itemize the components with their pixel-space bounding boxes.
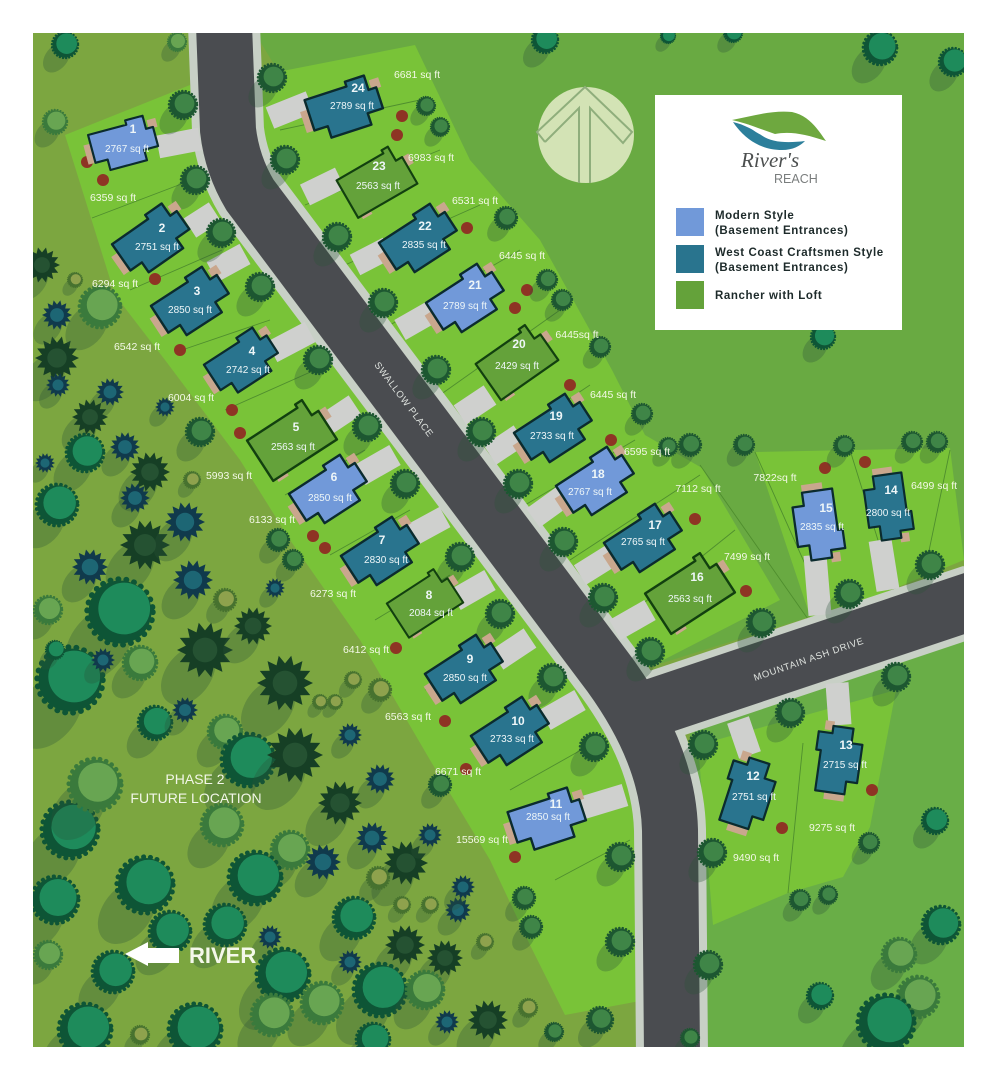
house 7: 7 xyxy=(379,533,386,547)
legend text: craftsman: (Basement Entrances) xyxy=(715,262,848,274)
house 21: 2789 sq ft xyxy=(443,301,487,312)
house 3 xyxy=(150,264,230,337)
lot area labels: 6133 sq ft xyxy=(249,514,295,526)
lot area labels: 6273 sq ft xyxy=(310,588,356,600)
house 9: 2850 sq ft xyxy=(443,673,487,684)
lot area labels: 6294 sq ft xyxy=(92,278,138,290)
house 17: 2765 sq ft xyxy=(621,537,665,548)
north compass xyxy=(537,87,634,183)
house 17: 17 xyxy=(648,518,662,532)
house 23: 23 xyxy=(372,159,386,173)
house 20: 2429 sq ft xyxy=(495,361,539,372)
phase 2 label: FUTURE LOCATION xyxy=(130,790,262,806)
lot area labels: 6445sq ft xyxy=(555,329,599,341)
house 11: 11 xyxy=(550,797,563,811)
house 2: 2751 sq ft xyxy=(135,242,179,253)
house 10: 2733 sq ft xyxy=(490,734,534,745)
house 2 xyxy=(110,201,191,275)
lot area labels: 5993 sq ft xyxy=(206,470,252,482)
lot area labels xyxy=(90,69,957,864)
west lots xyxy=(65,85,645,1015)
lot area labels: 6681 sq ft xyxy=(394,69,440,81)
lot area labels: 6499 sq ft xyxy=(911,480,957,492)
house 8: 8 xyxy=(426,588,433,602)
house 9: 9 xyxy=(467,652,474,666)
house 17 xyxy=(602,502,683,574)
legend text: modern: (Basement Entrances) xyxy=(715,225,848,237)
house 24: 2789 sq ft xyxy=(330,101,374,112)
phase 2 label xyxy=(130,771,262,806)
house 10: 10 xyxy=(511,714,525,728)
house 12 xyxy=(718,750,777,836)
legend swatch: craftsman xyxy=(676,245,704,273)
lot lines xyxy=(92,100,950,893)
house 8 xyxy=(386,568,464,639)
river arrow and label: RIVER xyxy=(189,943,256,968)
house 10 xyxy=(470,694,550,767)
house 18: 2767 sq ft xyxy=(568,487,612,498)
legend text: rancher: Rancher with Loft xyxy=(715,290,822,302)
legend swatch: rancher xyxy=(676,281,704,309)
legend panel xyxy=(655,95,902,330)
house 4 xyxy=(202,326,280,394)
logo: River's Reach: REACH xyxy=(774,172,818,186)
street name: Swallow Place: SWALLOW PLACE xyxy=(372,360,435,440)
lot area labels: 6595 sq ft xyxy=(624,446,670,458)
house 15: 15 xyxy=(819,501,833,515)
house 1: 2767 sq ft xyxy=(105,144,149,155)
lot area labels: 6004 sq ft xyxy=(168,392,214,404)
house 14 xyxy=(862,466,915,542)
lot area labels: 6983 sq ft xyxy=(408,152,454,164)
house 16: 16 xyxy=(690,570,704,584)
house 11 xyxy=(503,786,588,851)
legend text: modern: Modern Style xyxy=(715,210,794,222)
house 22: 2835 sq ft xyxy=(402,240,446,251)
lot area labels: 15569 sq ft xyxy=(456,834,508,846)
house 13: 2715 sq ft xyxy=(823,760,867,771)
house 16 xyxy=(644,552,736,636)
logo: River's Reach: River's xyxy=(740,148,799,172)
east lots xyxy=(250,45,780,672)
house 21 xyxy=(424,262,505,334)
house 6 xyxy=(288,452,368,525)
lot area labels: 6531 sq ft xyxy=(452,195,498,207)
lot area labels: 6445 sq ft xyxy=(590,389,636,401)
phase 2 label: PHASE 2 xyxy=(165,771,225,787)
house 22 xyxy=(378,202,458,274)
house 7: 2830 sq ft xyxy=(364,555,408,566)
house 14: 14 xyxy=(884,483,898,497)
house 16: 2563 sq ft xyxy=(668,594,712,605)
driveways xyxy=(158,102,888,808)
lot area labels: 9275 sq ft xyxy=(809,822,855,834)
logo: River's Reach xyxy=(732,112,826,186)
house 4: 2742 sq ft xyxy=(226,365,270,376)
legend text: craftsman: West Coast Craftsmen Style xyxy=(715,247,884,259)
house 24: 24 xyxy=(351,81,365,95)
house 5 xyxy=(246,398,338,482)
lot area labels: 7499 sq ft xyxy=(724,551,770,563)
house 15: 2835 sq ft xyxy=(800,522,844,533)
house 14: 2800 sq ft xyxy=(866,508,910,519)
house 20: 20 xyxy=(512,337,526,351)
house 1 xyxy=(84,114,160,172)
legend swatch: modern xyxy=(676,208,704,236)
house 5: 5 xyxy=(293,420,300,434)
river arrow and label xyxy=(125,942,256,968)
house 20 xyxy=(474,324,560,402)
lot area labels: 6671 sq ft xyxy=(435,766,481,778)
house 19: 2733 sq ft xyxy=(530,431,574,442)
house 18: 18 xyxy=(591,467,605,481)
house 23 xyxy=(336,146,418,219)
house 2: 2 xyxy=(159,221,166,235)
house 4: 4 xyxy=(249,344,256,358)
house 11: 2850 sq ft xyxy=(526,812,570,823)
house 8: 2084 sq ft xyxy=(409,608,453,619)
houses xyxy=(80,72,915,856)
lot area labels: 7822sq ft xyxy=(753,472,797,484)
lot area labels: 6412 sq ft xyxy=(343,644,389,656)
house 13: 13 xyxy=(839,738,853,752)
lot area labels: 6563 sq ft xyxy=(385,711,431,723)
lot area labels: 9490 sq ft xyxy=(733,852,779,864)
street name: Mountain Ash Drive: MOUNTAIN ASH DRIVE xyxy=(752,636,866,684)
red shrubs xyxy=(81,110,878,863)
house 19: 19 xyxy=(549,409,563,423)
house 19 xyxy=(512,392,593,464)
house 3: 2850 sq ft xyxy=(168,305,212,316)
lot area labels: 6542 sq ft xyxy=(114,341,160,353)
house 23: 2563 sq ft xyxy=(356,181,400,192)
lots 12 and 13 xyxy=(698,690,896,925)
house 15 xyxy=(790,480,847,567)
house 1: 1 xyxy=(130,122,137,136)
house 21: 21 xyxy=(468,278,482,292)
upper right lawn xyxy=(255,33,964,670)
lot area labels: 7112 sq ft xyxy=(675,483,721,495)
lots 14 and 15 xyxy=(755,448,964,622)
house 24 xyxy=(300,74,384,139)
house 12: 2751 sq ft xyxy=(732,792,776,803)
house 6: 6 xyxy=(331,470,338,484)
house 22: 22 xyxy=(418,219,432,233)
house 7 xyxy=(340,514,420,587)
road: Swallow Place and Mountain Ash Drive xyxy=(224,25,975,1055)
house 3: 3 xyxy=(194,284,201,298)
lower right lawn xyxy=(690,630,964,1047)
lot area labels: 6359 sq ft xyxy=(90,192,136,204)
lot area labels: 6445 sq ft xyxy=(499,250,545,262)
house 9 xyxy=(424,632,504,705)
house 18 xyxy=(554,444,635,517)
house 13 xyxy=(810,719,867,803)
house 12: 12 xyxy=(746,769,760,783)
house 6: 2850 sq ft xyxy=(308,493,352,504)
house 5: 2563 sq ft xyxy=(271,442,315,453)
